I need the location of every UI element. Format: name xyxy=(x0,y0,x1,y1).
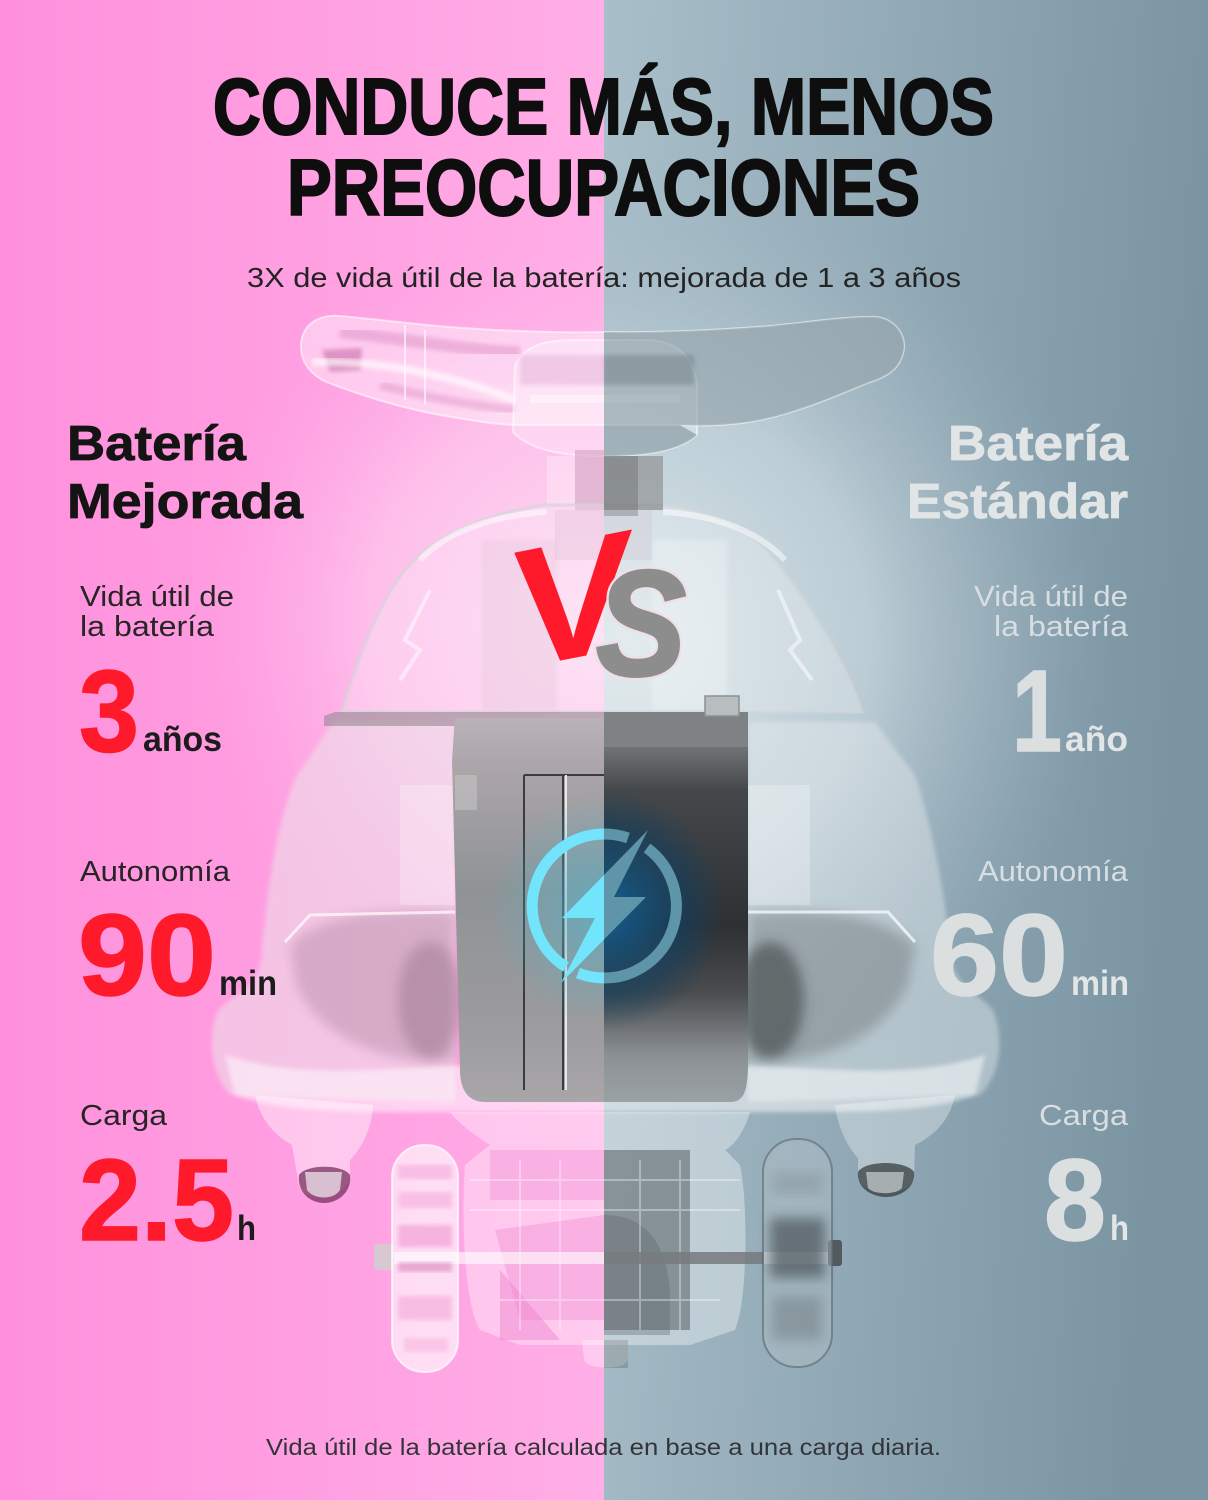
stat: battery life 3 years: 3 xyxy=(79,646,139,776)
title: CONDUCE MÁS, MENOS xyxy=(213,62,994,151)
transparent ride-on car illustration xyxy=(212,316,999,1372)
heading: Batería Estándar xyxy=(907,417,1129,529)
front casters xyxy=(255,1095,955,1203)
battery body right xyxy=(604,712,748,1102)
stat: charge 2.5 h: 2.5 xyxy=(79,1135,234,1265)
stat: charge 2.5 h: h xyxy=(237,1209,256,1248)
heading: Batería Mejorada: Batería xyxy=(67,417,247,471)
background: pink half xyxy=(0,0,604,1500)
stat: range 90 min: Autonomía xyxy=(80,856,231,888)
S gap: S xyxy=(596,539,686,707)
V letter: V xyxy=(513,493,633,707)
heading: Batería Estándar: Batería xyxy=(948,417,1129,471)
stat: charge 8 h: 8 xyxy=(1044,1135,1106,1265)
panel: upgraded battery xyxy=(67,417,304,1265)
stat: battery life 1 year: año xyxy=(1065,720,1128,759)
stat: range 60 min: min xyxy=(1071,964,1129,1003)
rear assembly xyxy=(450,1112,750,1368)
VS badge xyxy=(513,493,686,707)
battery pack xyxy=(324,696,748,1102)
stat: range 90 min: min xyxy=(219,964,277,1003)
glow left xyxy=(511,811,604,1009)
icon: lightning charge xyxy=(532,830,676,983)
axle xyxy=(374,1240,842,1270)
stat: battery life 1 year: Vida útil de xyxy=(974,581,1128,613)
stat: charge 8 h: h xyxy=(1110,1209,1129,1248)
title xyxy=(213,62,994,232)
bolt right xyxy=(604,830,648,940)
battery lid ledge xyxy=(324,712,604,726)
stat: battery life 1 year xyxy=(974,581,1129,776)
glow right xyxy=(604,800,712,1024)
heading: Batería Estándar: Estándar xyxy=(907,475,1128,529)
stat: battery life 3 years xyxy=(79,581,234,776)
battery top band right xyxy=(604,712,748,747)
panel: standard battery xyxy=(907,417,1129,1265)
battery highlight strip xyxy=(565,775,567,1090)
rear wheel left xyxy=(392,1145,458,1372)
upper body dome xyxy=(342,505,862,712)
stat: range 60 min: Autonomía xyxy=(978,856,1129,888)
battery panel lines xyxy=(524,775,604,1090)
subtitle: 3X de vida útil de la batería: mejorada de 1 a 3 años xyxy=(247,262,961,293)
heading: Batería Mejorada: Mejorada xyxy=(67,475,304,529)
stat: battery life 1 year: 1 xyxy=(1012,646,1062,776)
stat: battery life 3 years: años xyxy=(143,720,222,759)
S letter: S xyxy=(596,539,686,707)
lid latch xyxy=(705,696,739,716)
stat: charge 8 h xyxy=(1039,1100,1129,1265)
steering hub xyxy=(513,340,697,510)
stat: range 90 min: 90 xyxy=(78,890,216,1020)
rear wheel right xyxy=(763,1139,832,1367)
bolt left xyxy=(561,875,604,983)
ring left xyxy=(532,834,604,978)
background: blue-grey half xyxy=(604,0,1208,1500)
stat: range 60 min: 60 xyxy=(930,890,1068,1020)
steering wheel xyxy=(301,316,904,425)
battery body left xyxy=(452,718,604,1102)
title: PREOCUPACIONES xyxy=(287,143,920,232)
heading: Batería Mejorada xyxy=(67,417,304,529)
stat: battery life 3 years: Vida útil de xyxy=(80,581,234,613)
stat: range 60 min xyxy=(930,856,1129,1020)
lower body shell xyxy=(212,720,999,1112)
stat: charge 2.5 h: Carga xyxy=(80,1100,168,1132)
steering darkening, right half xyxy=(604,317,904,516)
stat: range 90 min xyxy=(78,856,277,1020)
battery side tab xyxy=(455,775,477,810)
stat: battery life 3 years: la batería xyxy=(80,611,215,643)
ring right xyxy=(604,834,676,978)
stat: battery life 1 year: la batería xyxy=(994,611,1129,643)
stat: charge 8 h: Carga xyxy=(1039,1100,1129,1132)
footnote: Vida útil de la batería calculada en base a una carga diaria. xyxy=(266,1434,941,1460)
